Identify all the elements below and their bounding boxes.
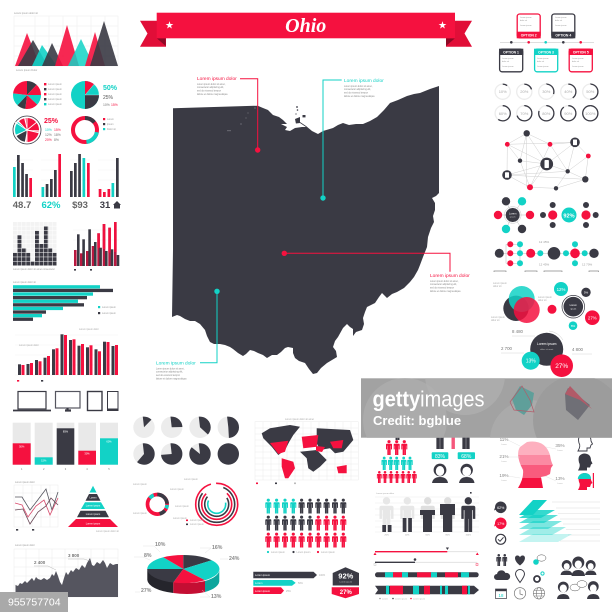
pie chart 3: 25%	[44, 118, 59, 125]
bubble stats: 4 800	[572, 347, 584, 352]
venn diagram: Lorem ipsum	[538, 296, 552, 299]
callout: north-east: consectetur adipiscing elit,	[344, 88, 371, 91]
option boxes: bottom row: Lorem ipsum	[502, 58, 514, 60]
3D pie chart: 16%	[212, 545, 223, 551]
head chart: Lorem	[501, 444, 507, 446]
callout: south-west: sed do eiusmod tempor	[156, 374, 180, 377]
donut labels: Lorem ipsum	[173, 517, 187, 520]
head chart: Lorem	[557, 450, 563, 452]
flow diagram: 12 70%	[582, 262, 593, 266]
people grid: Lorem ipsum	[296, 551, 310, 554]
option boxes: bottom row: dolor sit	[537, 60, 544, 63]
slider: dark	[374, 558, 478, 566]
column chart: Lorem ipsum dolor	[79, 328, 99, 331]
striped arrow bar	[375, 586, 479, 600]
badges	[494, 501, 507, 544]
striped arrow bar: Lorem ipsum	[413, 597, 425, 600]
progress rings	[495, 84, 598, 121]
layered stack chart	[519, 500, 600, 542]
option boxes: bottom row: Lorem ipsum	[537, 58, 549, 60]
line chart: Lorem ipsum dolor	[15, 481, 35, 484]
option boxes: top row: OPTION 4	[555, 34, 571, 38]
arrow bars: 25%	[286, 590, 292, 593]
Sandusky bay	[281, 123, 306, 131]
pie chart 2: 10%	[103, 103, 110, 107]
pie 1 legend: Lorem ipsum	[48, 93, 62, 96]
arrow bars: 100%	[319, 574, 326, 577]
callout: south-east: Lorem ipsum dolor	[430, 273, 470, 279]
donut legend: Ipsum	[107, 123, 114, 126]
bar charts with numbers: 48.7	[13, 200, 31, 211]
head chart: 19%	[499, 473, 509, 478]
progress rings: 10%	[499, 89, 507, 94]
striped arrow bar: Lorem	[382, 597, 388, 600]
horizontal bar chart: Lorem ipsum	[102, 312, 116, 315]
pie chart 1	[20, 88, 34, 102]
timeline	[500, 41, 594, 44]
icons: devices	[13, 392, 118, 410]
network diagram	[502, 130, 591, 190]
head chart: 13%	[555, 476, 565, 481]
callout: south-west: Lorem ipsum dolor	[156, 360, 196, 366]
height silhouettes chart	[375, 492, 479, 536]
world map	[255, 418, 358, 484]
donut labels: Lorem ipsum	[133, 512, 147, 515]
striped arrow bar: Lorem ipsum	[395, 597, 407, 600]
option boxes: bottom row: dolor sit	[572, 60, 579, 63]
icon: cloud	[494, 570, 510, 580]
pyramid chart: Lorem ipsum	[86, 513, 100, 516]
area chart: 2 400	[34, 560, 46, 565]
pie chart 2	[71, 81, 118, 109]
pie 1 legend: Lorem ipsum	[48, 88, 62, 91]
gender comparison: 68%	[461, 454, 472, 460]
people grid: Lorem ipsum	[271, 551, 285, 554]
pie 1 legend: Lorem ipsum	[48, 103, 62, 106]
height silhouettes chart: 100%	[465, 534, 471, 536]
icon: two people talking	[557, 581, 600, 599]
head chart: 35%	[555, 443, 565, 448]
pie chart 2: 50%	[103, 85, 118, 92]
pyramid chart	[68, 486, 119, 533]
option boxes: top row: OPTION 2	[521, 34, 537, 38]
icon: calendar: 18	[499, 593, 504, 598]
flow diagram	[494, 240, 599, 272]
stacked column chart: 1	[21, 467, 23, 471]
venn diagram: Lorem ipsum	[491, 316, 505, 319]
head chart: 21%	[499, 454, 509, 459]
option boxes: top row: Lorem ipsum	[520, 25, 532, 27]
3D pie chart	[134, 542, 240, 600]
striped progress bar	[375, 572, 479, 577]
height silhouettes chart: 40%	[405, 534, 410, 536]
area chart: 3 800	[68, 553, 80, 558]
option boxes: bottom row	[499, 49, 593, 72]
progress rings: 90%	[564, 111, 573, 116]
venn diagram: Lorem ipsum	[493, 282, 507, 285]
pie chart 3: 15%	[54, 128, 61, 132]
3D pie chart: 8%	[144, 553, 152, 559]
option boxes: bottom row: Lorem ipsum	[502, 66, 514, 68]
concentric rings chart	[196, 483, 238, 525]
bubble stats: 27%	[555, 363, 568, 370]
bubble chart: ipsum	[570, 308, 576, 310]
callout: south-east: sed do eiusmod tempor	[430, 286, 454, 290]
rings legend: Lorem ipsum	[190, 519, 204, 522]
venn diagram: dolor sit	[538, 299, 547, 302]
pyramid chart: Lorem ipsum	[86, 522, 100, 526]
icon: banner stars	[165, 20, 447, 32]
callout: south-east	[282, 251, 470, 293]
people pyramid	[377, 422, 417, 483]
block chart	[13, 222, 57, 271]
block chart: Lorem ipsum dolor sit amet consectetur	[13, 268, 55, 271]
rings legend: Lorem ipsum	[190, 523, 204, 526]
callout: south-east: labore et dolore magna aliqua	[430, 290, 461, 293]
badges: 62%	[497, 506, 505, 510]
stacked column chart: 85%	[63, 430, 69, 434]
callout: north-west	[197, 76, 260, 153]
icon: pin	[516, 570, 524, 582]
progress rings: 50%	[586, 89, 595, 94]
pyramid chart: Lorem ipsum dolor sit	[96, 530, 119, 533]
icon: calendar	[496, 589, 506, 598]
bubble chart: 8%	[571, 324, 575, 328]
pie chart 2: 25%	[103, 95, 114, 101]
title text: Ohio	[285, 15, 326, 37]
icon: couple	[496, 554, 507, 566]
head chart: Lorem	[501, 480, 507, 482]
chart: mountain peaks: Lorem ipsum dolor sit	[14, 12, 38, 15]
progress rings: 100%	[585, 111, 596, 116]
3D pie chart: 24%	[229, 556, 240, 562]
icons: small heads	[578, 434, 594, 490]
people grid	[265, 499, 346, 554]
option boxes: bottom row: Lorem ipsum	[572, 66, 584, 68]
column chart	[15, 328, 118, 382]
arrow bars: Lorem ipsum	[255, 589, 270, 593]
3D pie chart: 13%	[211, 594, 222, 600]
progress rings: 40%	[564, 89, 573, 94]
callout: north-east: Lorem ipsum dolor sit amet,	[344, 85, 373, 88]
bubble chart: Lorem	[570, 303, 577, 307]
3D pie chart: 27%	[141, 588, 152, 594]
world map: Lorem ipsum dolor sit amet	[285, 418, 314, 421]
stacked column chart: 2	[43, 467, 45, 471]
donut labels: Lorem ipsum	[170, 488, 184, 491]
image id band	[0, 592, 68, 612]
callout: north-east: labore et dolore magna aliqua	[344, 95, 375, 98]
bubble chart: 12%	[557, 287, 565, 292]
progress rings: 20%	[520, 89, 529, 94]
watermark band: gettyimages	[372, 386, 484, 412]
hexagon stats: 92%	[338, 572, 354, 580]
callout: south-east: Lorem ipsum dolor sit amet,	[430, 280, 459, 283]
bar charts with numbers: $93	[72, 200, 88, 211]
stacked column chart: 15%	[41, 458, 47, 462]
bubble stats	[501, 329, 592, 377]
pie chart 3: 8%	[54, 138, 59, 142]
arrow bars: Lorem	[255, 581, 262, 585]
arrow bars: 50%	[298, 582, 304, 585]
height silhouettes chart: 60%	[426, 534, 430, 536]
option boxes: top row: dolor sit	[520, 19, 527, 22]
pie chart 2: 15%	[111, 103, 118, 107]
callout: south-west: Lorem ipsum dolor sit amet,	[156, 368, 185, 370]
donut labels: Lorem ipsum	[184, 478, 198, 481]
lake islands	[295, 106, 306, 117]
bubble cluster right: 92%	[563, 213, 575, 219]
line chart	[14, 481, 58, 531]
callout: south-east: consectetur adipiscing elit,	[430, 283, 457, 286]
height silhouettes chart: 20%	[385, 534, 389, 536]
gender comparison	[432, 416, 475, 483]
donut legend: Lorem	[107, 118, 114, 121]
callout: north-west: Lorem ipsum dolor	[197, 76, 237, 82]
horizontal bar chart: Lorem ipsum	[102, 306, 116, 309]
bubble chart: 27%	[588, 316, 597, 320]
column chart: Lorem ipsum dolor	[19, 344, 39, 347]
horizontal bar chart: Lorem ipsum dolor sit	[13, 281, 36, 284]
pyramid chart: Lorem ipsum	[86, 504, 100, 508]
paired bar chart	[73, 222, 119, 271]
slider: red	[374, 548, 479, 555]
stacked column chart	[13, 423, 118, 471]
option boxes: bottom row: OPTION 1	[503, 50, 519, 54]
chart: mountain peaks	[14, 12, 118, 72]
horizontal bar chart	[13, 281, 116, 321]
head chart: 11%	[500, 437, 508, 442]
bubble chart: 5%	[584, 290, 588, 294]
callout: south-west	[156, 289, 220, 380]
image id band: 955757704	[8, 596, 61, 608]
stacked column chart: 50%	[19, 444, 25, 448]
pie chart 3: 20%	[45, 138, 52, 142]
bubble stats: 13%	[526, 358, 536, 364]
hexagon stats	[332, 567, 359, 598]
donut legend: Dolor sit	[107, 128, 116, 131]
callout: north-west: Lorem ipsum dolor sit amet,	[197, 83, 226, 86]
callout: north-east	[320, 78, 384, 201]
donut labels: Lorem ipsum	[133, 483, 147, 486]
venn diagram: dolor sit	[491, 319, 500, 322]
callout: south-west: labore et dolore magna aliqua	[156, 378, 187, 380]
flow diagram: 12 45%	[539, 240, 550, 244]
icon: banner stars: ★	[165, 20, 174, 32]
bubble cluster right	[540, 202, 599, 228]
fraction pies	[133, 417, 239, 465]
bubble cluster left: Lorem	[509, 212, 516, 216]
stacked column chart: 3	[65, 467, 67, 471]
rings legend	[186, 519, 204, 526]
area chart: Lorem ipsum dolor	[15, 544, 35, 547]
icon: heart	[515, 555, 525, 566]
bar charts with numbers: 31	[100, 200, 111, 211]
watermark band	[361, 378, 612, 438]
head chart: Lorem	[501, 461, 507, 463]
bubble chart	[548, 282, 600, 330]
option boxes: bottom row: Lorem ipsum	[572, 58, 584, 60]
pie chart 3: 12%	[45, 133, 52, 137]
option boxes: bottom row: Lorem ipsum	[537, 66, 549, 68]
icon: clock	[514, 588, 526, 599]
stacked column chart: 4	[86, 467, 88, 471]
callout: south-west: consectetur adipiscing elit,	[156, 370, 183, 374]
donut labels	[133, 478, 198, 520]
donut legend	[103, 118, 116, 131]
icon: banner stars: ★	[438, 20, 447, 32]
head chart: Lorem	[557, 483, 563, 485]
venn diagram: dolor sit	[493, 285, 502, 288]
progress rings: 60%	[499, 111, 507, 116]
pyramid chart: Lorem	[89, 496, 97, 500]
bar charts with numbers: 62%	[41, 200, 61, 211]
arrow bars: Lorem ipsum	[255, 573, 270, 577]
bubble cluster left: ipsum	[510, 216, 516, 218]
donut chart small	[148, 494, 167, 514]
gender comparison: 83%	[435, 454, 446, 460]
chart: mountain peaks: Lorem Ipsum Dolor	[16, 69, 37, 72]
hexagon stats: 27%	[340, 590, 352, 596]
bubble stats: 8 480	[512, 329, 524, 334]
pie 1 legend: Lorem ipsum	[48, 83, 62, 86]
pie 1 legend	[44, 83, 62, 106]
pie chart 3: 18%	[54, 133, 61, 137]
callout: north-west: labore et dolore magna aliqua	[197, 93, 228, 96]
progress rings: 30%	[542, 89, 551, 94]
pie 1 legend: Lorem ipsum	[48, 98, 62, 101]
flow diagram: 12 45%	[539, 262, 550, 266]
option boxes: top row: dolor sit	[555, 19, 562, 22]
bubble stats: Lorem ipsum	[537, 342, 557, 346]
area chart	[14, 544, 118, 597]
bubble stats: 2 700	[501, 346, 513, 351]
callout: north-west: sed do eiusmod tempor	[197, 90, 221, 92]
option boxes: bottom row: OPTION 5	[573, 50, 589, 54]
bubble stats: dolor sit amet	[540, 348, 554, 351]
height silhouettes chart: Lorem ipsum dolor	[376, 492, 394, 495]
arrow bars	[253, 572, 326, 594]
option boxes: bottom row: OPTION 3	[538, 50, 554, 54]
stacked column chart: 5	[108, 467, 110, 471]
hexagon stats: Lorem ipsum	[339, 580, 352, 584]
option boxes: top row: Lorem ipsum	[555, 25, 567, 27]
progress rings: 70%	[520, 111, 529, 116]
people grid: Lorem ipsum	[321, 551, 335, 554]
callout: north-east: sed do eiusmod tempor	[344, 92, 368, 94]
option boxes: bottom row: dolor sit	[502, 60, 509, 63]
icon: people group	[560, 556, 596, 576]
3D pie chart: 10%	[155, 542, 166, 548]
venn diagram	[491, 282, 552, 323]
bar charts with numbers	[13, 154, 121, 211]
option boxes: top row	[517, 14, 575, 38]
pie chart 3: 10%	[45, 128, 52, 132]
pie chart 3	[13, 116, 61, 144]
title banner	[140, 13, 472, 47]
donut labels: Lorem ipsum	[175, 505, 189, 508]
option boxes: top row: Lorem ipsum	[555, 17, 567, 19]
height silhouettes chart: 80%	[446, 534, 450, 536]
head chart	[499, 437, 565, 489]
bubble cluster left	[494, 197, 534, 233]
stacked column chart: 30%	[84, 452, 90, 456]
callout: north-west: consectetur adipiscing elit,	[197, 86, 224, 89]
badges: 17%	[497, 522, 505, 526]
stacked column chart: 60%	[106, 440, 112, 444]
watermark band: Credit: bgblue	[373, 413, 461, 428]
icon: gears	[534, 572, 544, 582]
callout: north-east: Lorem ipsum dolor	[344, 78, 384, 84]
donut chart	[73, 118, 97, 142]
map: Ohio	[172, 86, 439, 374]
option boxes: top row: Lorem ipsum	[520, 17, 532, 19]
progress rings: 80%	[542, 111, 551, 116]
icon: chat bubbles	[533, 555, 546, 565]
icon: globe	[533, 588, 545, 599]
